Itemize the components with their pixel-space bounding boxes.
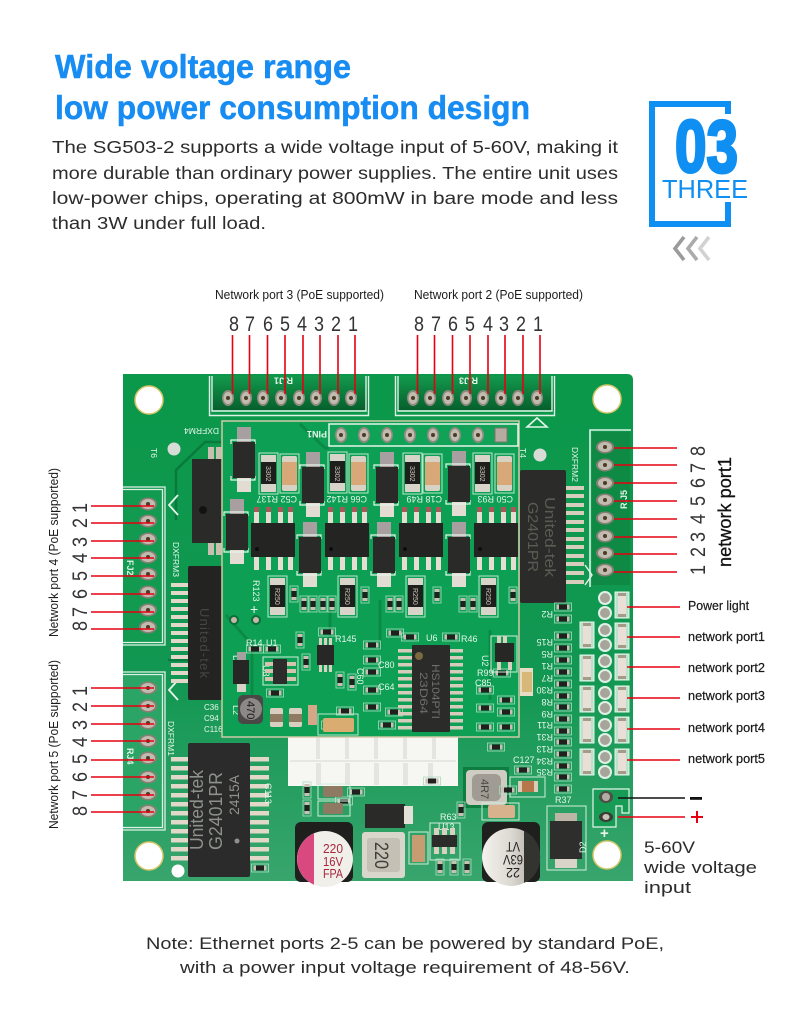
port 4 pins (139, 498, 157, 634)
module text labels: C60 (355, 668, 365, 685)
LEDs right column (615, 592, 629, 775)
resistor column: R7 (541, 673, 553, 683)
silkscreen labels on main board: C94 (204, 714, 219, 723)
callout: network port 5: 1 (69, 686, 92, 696)
callout: network port 2: 2 (516, 313, 526, 336)
transformer chip lower left: G2401PR 2415A: United-tek (187, 769, 207, 850)
trace shading (168, 442, 224, 660)
footnote: Note: Ethernet ports 2-5 can be powered by standard PoE, (146, 934, 664, 953)
port 2 pins (407, 390, 543, 406)
callout: network port 5 (46, 660, 154, 829)
header: network port 2 silkscreen: R.J3 (459, 376, 478, 386)
silkscreen labels on main board (149, 426, 580, 756)
misc lower resistors and caps: U13 (438, 822, 455, 832)
callout: network port 4: 7 (69, 607, 92, 617)
electrolytic capacitor 220uF (295, 822, 353, 887)
3302 resistors and capacitors (256, 452, 514, 504)
title: Wide voltage range (55, 48, 351, 85)
transformer chip right: G2401PR (520, 470, 584, 603)
header: network port 4 silkscreen (123, 487, 178, 645)
module text labels: + (250, 601, 258, 617)
callout: network port 2: Network port 2 (PoE supported) (414, 287, 583, 302)
callout: network port 1: 1 (687, 565, 710, 575)
title: low power consumption design (55, 89, 530, 126)
electrolytic capacitor 220uF: 220 (323, 842, 343, 856)
badge: 03 three (652, 104, 748, 224)
input voltage label (643, 838, 757, 897)
callout: network port 3: 2 (331, 313, 341, 336)
callout: network port 2: 4 (483, 313, 493, 336)
LED callouts (627, 598, 765, 766)
IC U2 (491, 636, 517, 672)
LED callouts: network port1 (688, 629, 765, 644)
callout: network port 4: 3 (69, 537, 92, 547)
chip near port 4 (192, 447, 224, 555)
module text labels: U1 (266, 638, 278, 648)
transformer chip lower left: G2401PR 2415A (171, 743, 269, 877)
port 5 pins (139, 682, 157, 818)
board base (123, 374, 633, 881)
module text labels: R99 (477, 668, 494, 678)
callout: network port 4 (46, 468, 154, 637)
round pad pairs (598, 591, 612, 779)
electrolytic capacitor 220uF: FPA (323, 867, 344, 881)
callout: network port 1: 3 (687, 532, 710, 542)
board pins (139, 390, 614, 818)
3302 resistors and capacitors: 3302 (478, 466, 485, 482)
module vias (230, 616, 260, 624)
R250 resistors: R250 (411, 588, 418, 605)
callout: network port 3: 5 (280, 313, 290, 336)
R250 resistors: R250 (273, 588, 280, 605)
electrolytic capacitor 22uF (482, 822, 540, 886)
inductor 470: 470 (244, 701, 256, 719)
callout: network port 1: 2 (687, 547, 710, 557)
input voltage label: 5-60V (644, 838, 696, 857)
callout: network port 1: 7 (687, 463, 710, 473)
callout: network port 5: Network port 5 (PoE supported) (46, 660, 61, 829)
inductor 220 (362, 832, 405, 878)
callout: network port 4: 5 (69, 571, 92, 581)
module text labels: U2 (480, 655, 490, 667)
module PIN header: PIN1 (307, 429, 327, 439)
header: network port 2 silkscreen (396, 376, 554, 427)
IC HS104PTI: HS104PTI (429, 664, 441, 719)
R250 resistors: R250 (343, 588, 350, 605)
electrolytic capacitor 22uF: 22 (506, 865, 520, 881)
callout: network port 3: 6 (263, 313, 273, 336)
3302 resistors and capacitors: C50 R93 (477, 494, 513, 504)
resistor column: R15 (536, 637, 553, 647)
module capacitors (270, 705, 358, 735)
callout: network port 3: 7 (245, 313, 255, 336)
misc lower resistors and caps (252, 743, 516, 875)
LED callouts: network port5 (688, 751, 765, 766)
white connector (288, 737, 458, 786)
resistor column: R8 (541, 697, 553, 707)
callout: network port 2: 1 (533, 313, 543, 336)
silkscreen labels on main board: T4 (518, 448, 528, 458)
callout: network port 5: 8 (69, 806, 92, 816)
diode D2: D2 (578, 841, 588, 853)
callout: network port 3: 4 (297, 313, 307, 336)
small capacitors C127 C3 C8: C127 (513, 755, 535, 765)
title (55, 48, 530, 126)
electrolytic capacitor 220uF: 16V (323, 855, 344, 869)
badge: 03 three: THREE (662, 174, 748, 204)
header: network port 5 silkscreen: RJ4 (125, 748, 135, 765)
callout: network port 3 (215, 287, 384, 394)
callout: network port 4: 2 (69, 518, 92, 528)
inductor 220: 220 (370, 842, 391, 869)
callout: network port 1 (614, 446, 735, 575)
IC U3 (263, 657, 298, 685)
module text labels: D4 (231, 655, 241, 667)
inductor 4R7: 4R7 (478, 779, 490, 799)
circuit board (123, 374, 633, 887)
callout: network port 2: 3 (499, 313, 509, 336)
inductor 470 (238, 695, 263, 724)
callout: network port 5: 7 (69, 790, 92, 800)
module text labels: R145 (335, 634, 357, 644)
callout: network port 4: 8 (69, 621, 92, 631)
module text labels: C80 (378, 660, 395, 670)
LED callouts: network port2 (688, 660, 765, 675)
callout: network port 1: 8 (687, 446, 710, 456)
callout: network port 5: 3 (69, 720, 92, 730)
footnote: with a power input voltage requirement of 48-56V. (179, 958, 630, 977)
LED callouts: network port3 (688, 688, 765, 703)
3302 resistors and capacitors: 3302 (264, 466, 271, 482)
misc lower resistors and caps: R63 (440, 812, 457, 822)
callout: network port 5: 6 (69, 772, 92, 782)
callout: network port 5: 2 (69, 702, 92, 712)
tan capacitor near module (520, 668, 533, 696)
callout: network port 4: Network port 4 (PoE supported) (46, 468, 61, 637)
transformer chip lower left: G2401PR 2415A: G2401PR (206, 772, 226, 850)
input voltage label: input (644, 878, 691, 897)
badge: 03 three: 03 (675, 105, 738, 188)
3302 resistors and capacitors: C18 R49 (406, 494, 442, 504)
callout: network port 3: 1 (348, 313, 358, 336)
module text labels: U3 (261, 665, 271, 677)
resistor column: R34 (536, 756, 553, 766)
callout: network port 2: 8 (414, 313, 424, 336)
header: network port 3 silkscreen (210, 376, 368, 416)
callout: network port 1: 6 (687, 478, 710, 488)
module text labels: R123 (251, 580, 261, 602)
silkscreen labels on main board: DXFRM1 (166, 721, 176, 756)
3302 resistors and capacitors: 3302 (408, 466, 415, 482)
callout: network port 1: 4 (687, 514, 710, 524)
IC HS104PTI (398, 645, 463, 732)
module PIN header (307, 424, 518, 446)
resistor column: R13 (536, 744, 553, 754)
3302 resistors and capacitors: C52 R137 (256, 494, 297, 504)
inductor 4R7 (463, 767, 509, 808)
header: network port 1 silkscreen (585, 430, 631, 587)
module text labels: R46 (461, 634, 478, 644)
electrolytic capacitor 22uF: 63V (502, 852, 523, 868)
transformer chip upper left (171, 566, 224, 700)
module text labels: R14 (246, 638, 263, 648)
callout: network port 3: Network port 3 (PoE supported) (215, 287, 384, 302)
port 3 pins (222, 390, 357, 406)
silkscreen labels on main board: DXFRM4 (184, 426, 219, 436)
diode D2 (547, 806, 588, 870)
resistor column: R11 (537, 720, 553, 730)
callout: network port 2: 7 (431, 313, 441, 336)
header: network port 5 silkscreen (123, 672, 178, 830)
header: network port 1 silkscreen: R.J5 (619, 490, 629, 509)
module text labels (231, 580, 494, 715)
module text labels: C85 (475, 678, 492, 688)
icon: chevrons (675, 237, 709, 260)
LEDs left column (580, 622, 594, 775)
SOIC chips (251, 507, 518, 570)
module text labels: U6 (426, 633, 438, 643)
polarity markers (618, 797, 703, 823)
transformer chip lower left: G2401PR 2415A: 2415A (226, 774, 242, 815)
input voltage label: wide voltage (643, 858, 757, 877)
silkscreen labels on main board: C116 (204, 725, 223, 734)
R250 resistors (268, 576, 498, 617)
header: network port 3 silkscreen: R.J1 (274, 376, 293, 386)
LED callouts: Power light (688, 598, 749, 613)
callout: network port 1: 5 (687, 496, 710, 506)
silkscreen labels on main board: C36 (204, 703, 219, 712)
silkscreen labels on main board: DXFRM3 (171, 542, 181, 577)
resistor column: R31 (536, 732, 553, 742)
resistor column: R2 (541, 609, 553, 619)
callout: network port 4: 6 (69, 589, 92, 599)
callout: network port 3: 3 (314, 313, 324, 336)
power terminal box (593, 789, 629, 842)
resistor column: R37 (555, 795, 572, 805)
LED callouts: network port4 (688, 720, 765, 735)
transformer chip right: G2401PR: United-tek (541, 497, 558, 578)
header: network port 4 silkscreen: FJ2 (125, 560, 135, 576)
footnote (146, 934, 664, 977)
electrolytic capacitor 22uF: VT (506, 839, 520, 855)
description text block (52, 137, 618, 233)
small capacitors C127 C3 C8 (482, 755, 545, 820)
lower diodes (224, 499, 470, 587)
callout: network port 2: 6 (448, 313, 458, 336)
module text labels: C64 (378, 682, 395, 692)
black chip above inductor 220 (365, 804, 413, 828)
transformer chip upper left: United-tek (197, 608, 212, 678)
silkscreen labels on main board: DXFRM2 (570, 447, 580, 482)
IC U13 (430, 823, 460, 860)
callout: network port 3: 8 (229, 313, 239, 336)
resistor column (536, 603, 572, 805)
small IC (317, 638, 334, 672)
misc lower resistors and caps: C113 (263, 783, 273, 804)
description text block: low-power chips, operating at 800mW in bare mode and less (52, 188, 618, 208)
description text block: The SG503-2 supports a wide voltage input of 5-60V, making it (52, 137, 618, 157)
resistor column: R35 (536, 767, 553, 777)
module text labels: L2 (231, 705, 241, 715)
callout: network port 2: 5 (465, 313, 475, 336)
callout: network port 5: 5 (69, 754, 92, 764)
description text block: than 3W under full load. (52, 213, 266, 233)
3302 resistors and capacitors: C66 R142 (326, 494, 367, 504)
R250 resistors: R250 (484, 588, 491, 605)
resistor column: R5 (541, 649, 553, 659)
power terminal box: + (600, 825, 609, 842)
callout: network port 4: 4 (69, 553, 92, 563)
IC HS104PTI: 23D64 (417, 672, 429, 714)
mounting holes (135, 385, 621, 870)
callout: network port 5: 4 (69, 737, 92, 747)
diode D4 (233, 652, 249, 692)
silkscreen labels on main board: T6 (149, 448, 159, 458)
callout: network port 2 (414, 287, 583, 394)
callout: network port 1: network port1 (715, 457, 735, 567)
transformer chip right: G2401PR: G2401PR (524, 502, 541, 572)
description text block: more durable than ordinary power supplies. The entire unit uses (52, 163, 618, 183)
resistor column: R9 (541, 709, 553, 719)
resistor column: R1 (541, 661, 553, 671)
small module resistors (246, 586, 517, 731)
inner power module board (222, 421, 519, 737)
3302 resistors and capacitors: 3302 (333, 466, 340, 482)
callout: network port 4: 1 (69, 503, 92, 513)
port 1 pins (596, 440, 614, 576)
resistor column: R30 (536, 685, 553, 695)
small vias (168, 442, 546, 878)
upper diodes (231, 427, 470, 517)
module darker traces (226, 424, 490, 700)
